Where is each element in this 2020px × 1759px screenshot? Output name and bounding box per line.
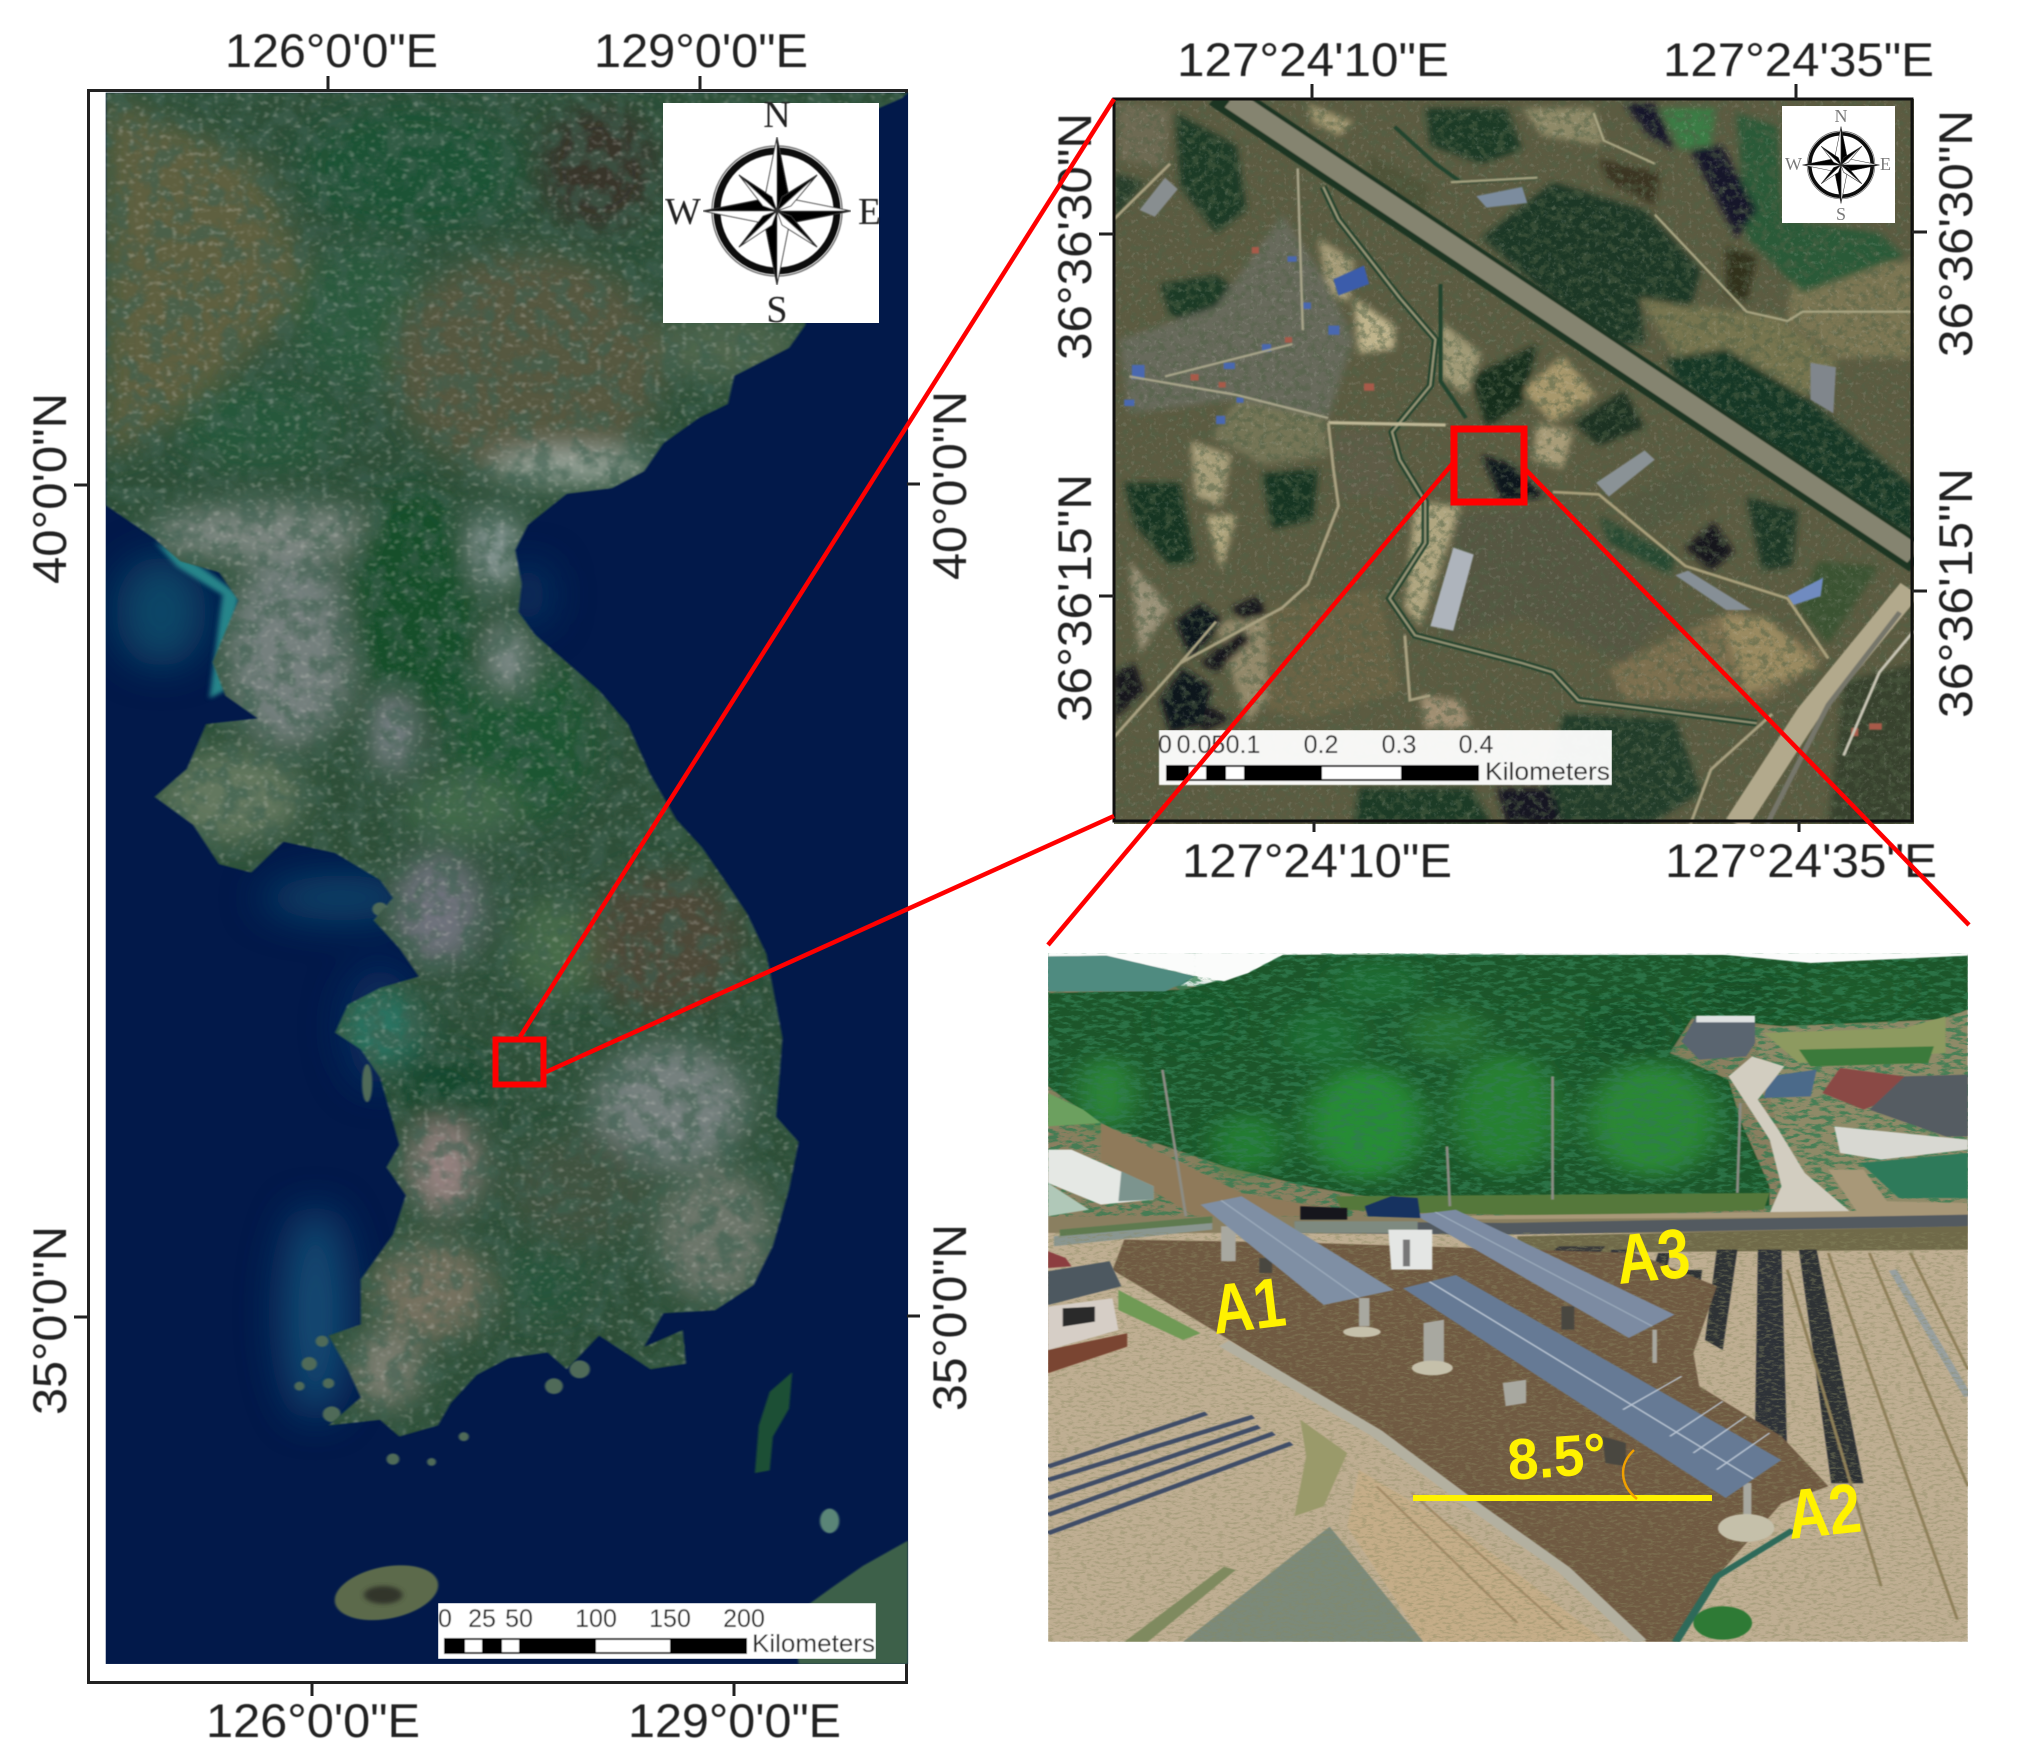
- compass rose inset: N: [763, 94, 791, 136]
- coordinate labels: 129°0'0"E: [628, 1694, 841, 1747]
- label: A1: A1: [1207, 1262, 1290, 1349]
- coordinate labels: 35°0'0"N: [23, 1226, 76, 1415]
- compass rose inset: E: [858, 191, 881, 233]
- scale bar: kilometers: 25: [468, 1605, 496, 1633]
- land: [106, 92, 908, 1437]
- panel: national satellite map: [23, 24, 976, 1747]
- coordinate labels: 127°24'35"E: [1665, 834, 1937, 887]
- hedge strip: [1517, 1226, 1968, 1253]
- coordinate labels: 129°0'0"E: [594, 24, 808, 77]
- map frame: [88, 90, 906, 1682]
- dark mulch rows: [1799, 1250, 1864, 1483]
- forest texture: [1048, 953, 1968, 1216]
- panel: local aerial map: [1048, 33, 1982, 887]
- label: 8.5 degrees: 8.5°: [1505, 1421, 1608, 1492]
- coordinate labels: 36°36'30"N: [1929, 110, 1982, 357]
- coordinate labels: 127°24'10"E: [1182, 834, 1452, 887]
- village roofs: [1333, 265, 1369, 296]
- scale bar: kilometers: 100: [575, 1605, 617, 1633]
- label: A3: A3: [1612, 1213, 1694, 1299]
- small compass rose inset: N: [1834, 106, 1848, 126]
- label: A2: A2: [1783, 1468, 1865, 1554]
- small compass rose inset: E: [1880, 154, 1891, 174]
- scale bar: kilometers: 0: [1158, 731, 1172, 759]
- panel: aerial photograph of solar panels: [1048, 953, 1968, 1642]
- village ground: [1119, 215, 1354, 418]
- scale bar: kilometers: Kilometers: [1485, 758, 1610, 786]
- scale bar: kilometers: 0: [438, 1605, 452, 1633]
- green fence: [1676, 1530, 1793, 1642]
- dark water paddies: [1691, 145, 1757, 238]
- axis ticks: [74, 76, 920, 1696]
- scale bar: kilometers: 50: [505, 1605, 533, 1633]
- plastic rows: [1048, 1413, 1291, 1533]
- satellite image of the Korean peninsula: [106, 93, 908, 1664]
- scale bar: kilometers: [1158, 730, 1612, 786]
- coordinate labels: [23, 24, 976, 1747]
- small compass rose inset: W: [1785, 154, 1802, 174]
- tilt angle line: [1413, 1495, 1712, 1501]
- coordinate labels: 36°36'30"N: [1048, 113, 1101, 360]
- coastal islands: [316, 1336, 328, 1347]
- scale bar: kilometers: [438, 1603, 876, 1659]
- earth bank: [1113, 1240, 1828, 1642]
- soil texture: [1048, 1233, 1968, 1642]
- coordinate labels: 127°24'10"E: [1177, 33, 1449, 86]
- Jeju island: [334, 1564, 440, 1621]
- compass rose inset: S: [766, 289, 788, 331]
- coordinate labels: 35°0'0"N: [923, 1224, 976, 1411]
- house: [1048, 1261, 1121, 1305]
- small compass rose inset: [1782, 106, 1895, 224]
- coordinate labels: 36°36'15"N: [1929, 468, 1982, 718]
- small compass rose inset: S: [1836, 204, 1846, 224]
- scale bar: kilometers: 0.3: [1382, 731, 1416, 759]
- dark forests: [1481, 182, 1701, 344]
- scale bar: kilometers: 0.05: [1177, 731, 1225, 759]
- scale bar: kilometers: 0.1: [1226, 731, 1260, 759]
- solar panel pillars: [1221, 1226, 1751, 1526]
- axis ticks: [1099, 84, 1927, 832]
- Tsushima island: [755, 1372, 792, 1473]
- compass rose inset: [663, 94, 881, 331]
- poles: [1162, 1070, 1740, 1216]
- scale bar: kilometers: 150: [649, 1605, 691, 1633]
- expressway junction: [1736, 589, 1910, 824]
- locator square on local map: [1454, 429, 1524, 502]
- scale bar: kilometers: 200: [723, 1605, 765, 1633]
- coordinate labels: 40°0'0"N: [923, 391, 976, 580]
- site photograph: [1048, 953, 1968, 1642]
- coordinate labels: [1048, 33, 1982, 887]
- tan field furrows: [1787, 1253, 1968, 1620]
- compass rose inset: W: [665, 191, 701, 233]
- cars: [1300, 1206, 1347, 1220]
- zoom lines: national map to local map: [520, 99, 1114, 1072]
- highway: [1213, 99, 1914, 566]
- coordinate labels: 127°24'35"E: [1663, 33, 1934, 86]
- aerial image: [1114, 99, 1914, 824]
- map frame: [1114, 99, 1912, 821]
- rice paddy: [1183, 1527, 1423, 1642]
- zoom lines: local map to photograph: [1048, 463, 1969, 945]
- coordinate labels: 40°0'0"N: [23, 393, 76, 584]
- canals and paths: [1323, 187, 1757, 723]
- scale bar: kilometers: 0.4: [1459, 731, 1493, 759]
- coordinate labels: 126°0'0"E: [225, 24, 438, 77]
- coordinate labels: 36°36'15"N: [1048, 474, 1101, 722]
- tilt angle arc: [1623, 1450, 1637, 1499]
- coordinate labels: 126°0'0"E: [206, 1694, 420, 1747]
- sky: [1195, 953, 1968, 981]
- scale bar: kilometers: 0.2: [1304, 731, 1338, 759]
- scale bar: kilometers: Kilometers: [752, 1630, 875, 1658]
- locator square on national map: [496, 1040, 544, 1084]
- concrete channel: [1224, 1343, 1641, 1642]
- solar arrays A1 A2 A3: [1201, 1196, 1394, 1305]
